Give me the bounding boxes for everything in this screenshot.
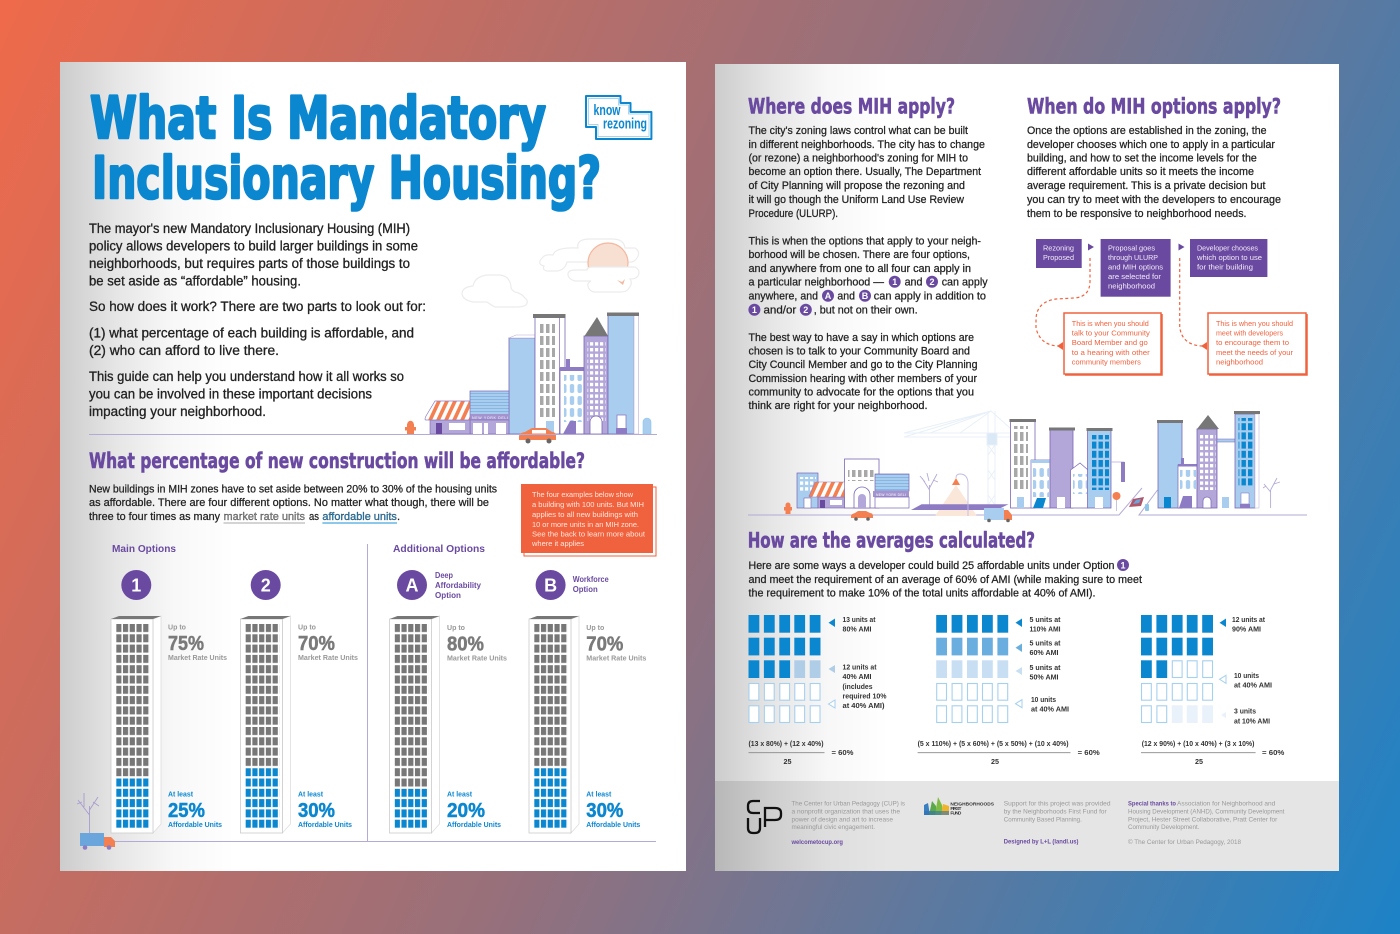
figures: option 2: 70% <box>298 633 335 655</box>
text: thanks: Association for Neighborhood and <box>1177 801 1276 808</box>
icons: inline option badges: B <box>862 291 869 301</box>
chart: unit mix three: 90% AMI <box>1232 625 1261 634</box>
figures: option B: Affordable Units <box>586 820 640 829</box>
chart: unit mix three: 3 units <box>1234 707 1256 716</box>
chart: unit mix three: 12 units at <box>1232 615 1265 624</box>
figures: option B: 70% <box>586 634 623 656</box>
intro text: (1) what percentage of each building is affordable, and <box>89 326 414 340</box>
text: where does MIH apply: and <box>837 290 855 302</box>
panel: left page <box>60 62 686 871</box>
text: where does MIH apply: Procedure (ULURP). <box>748 208 838 220</box>
logo: neighborhoods first fund: FUND <box>950 810 962 816</box>
option 1 <box>111 570 227 833</box>
text: CUP description: meaningful civic engagement. <box>792 824 875 831</box>
step: proposal through ULURP: are selected for <box>1108 272 1162 281</box>
arrow: to step three <box>1178 244 1184 250</box>
text: where does MIH apply: The best way to have a say in which options are <box>748 332 974 344</box>
arrow: to step two <box>1088 244 1094 250</box>
callout: meet developers: This is when you should <box>1216 319 1293 328</box>
intro text: be set aside as “affordable” housing. <box>89 274 301 288</box>
chart: unit mix one: required 10% <box>842 692 887 701</box>
chart: unit mix one: 25 <box>784 757 792 766</box>
paragraph: set aside: as affordable. There are four different options. No matter what though, there will be <box>89 497 489 509</box>
text: where does MIH apply: it will go though the Uniform Land Use Review <box>748 194 964 206</box>
figures: option A: At least <box>447 790 473 798</box>
illustration: city skyline <box>405 239 651 444</box>
icon: right buildings <box>1157 411 1260 508</box>
divider line <box>89 434 657 436</box>
chart: unit mix two: 5 units at <box>1030 663 1061 672</box>
logo: neighborhoods first fund: NEIGHBORHOODS <box>950 801 995 807</box>
title: Inclusionary Housing? <box>92 144 601 212</box>
chart: unit mix three: at 40% AMI <box>1234 681 1272 690</box>
heading: averages: How are the averages calculated? <box>748 528 1035 552</box>
icon: pale blue bus stop <box>1145 504 1149 511</box>
text: when do MIH options apply: developer chooses which one to apply in a particular <box>1027 139 1275 151</box>
logo: know rezoning <box>586 96 651 139</box>
text: where does MIH apply: Commission hearing with other members of your <box>748 373 977 385</box>
icons: inline option badges: 1 <box>892 277 897 287</box>
text: where does MIH apply: of City Planning will propose the rezoning and <box>748 180 965 192</box>
text: where does MIH apply: anywhere, and <box>748 290 818 302</box>
figures: option 2: Market Rate Units <box>298 653 358 662</box>
icons: inline option badges: A <box>825 291 832 301</box>
text: where does MIH apply: can apply in addition to <box>874 290 986 302</box>
option B: workforce: Workforce <box>573 575 609 584</box>
heading: where does MIH apply: Where does MIH apply? <box>748 94 955 118</box>
building: option 1 tower <box>111 616 161 833</box>
chart: unit mix two: 5 units at <box>1030 638 1061 648</box>
panel: right page <box>715 64 1339 871</box>
step: proposal through ULURP: Proposal goes <box>1108 244 1155 252</box>
callout: community board: talk to your Community <box>1072 328 1150 338</box>
option A: deep affordability: Option <box>435 591 461 600</box>
intro text: impacting your neighborhood. <box>89 404 266 419</box>
chart: unit mix two: 25 <box>991 757 999 766</box>
figures: option B: 30% <box>586 800 623 822</box>
step: rezoning proposed: Rezoning <box>1043 244 1074 252</box>
text: when do MIH options apply <box>1027 125 1281 220</box>
chart: unit mix one: 80% AMI <box>842 625 872 634</box>
chart: unit mix two: (5 x 110%) + (5 x 60%) + (5 x 50%) + (10 x 40%) <box>918 739 1069 748</box>
text: when do MIH options apply: average requirement. This is a private decision but <box>1027 180 1266 192</box>
figures: option 1: 75% <box>168 633 204 655</box>
chart: unit mix three: at 10% AMI <box>1234 716 1270 725</box>
step: proposal through ULURP: neighborhood <box>1108 282 1155 290</box>
figures: option 2: 30% <box>298 800 335 822</box>
paragraph: set aside: affordable units <box>322 511 397 523</box>
text: thanks: Project, Hester Street Collaborative, Pratt Center for <box>1128 816 1278 823</box>
figures: option B: At least <box>586 790 612 798</box>
text: where does MIH apply: a particular neighborhood — <box>748 276 884 288</box>
chart: unit mix one: (13 x 80%) + (12 x 40%) <box>748 739 824 748</box>
icon: shops block <box>797 459 909 508</box>
figures: option 1: At least <box>168 790 194 798</box>
paragraph: set aside: . <box>397 511 400 523</box>
icon: shops block: NEW YORK DELI <box>876 493 906 497</box>
icon: street baseline <box>748 488 1307 515</box>
option A: deep affordability: A <box>406 576 418 596</box>
logo: CUP <box>748 801 781 833</box>
icon: tree <box>920 473 938 505</box>
figures: option B <box>586 623 646 829</box>
chart: unit mix two: 110% AMI <box>1030 625 1060 634</box>
figures: option 1: Affordable Units <box>168 820 222 829</box>
figures: option 2 <box>298 622 358 829</box>
step: developer chooses <box>1190 239 1267 277</box>
step: rezoning proposed <box>1036 239 1082 268</box>
arrow: dashed to developers <box>1180 258 1207 350</box>
paragraph: set aside <box>89 484 497 523</box>
intro text <box>89 221 426 419</box>
figures: option A: Affordable Units <box>447 820 501 829</box>
figures: option B: Up to <box>586 623 605 632</box>
chart: unit mix three: 25 <box>1195 757 1203 766</box>
step: developer chooses: for their building <box>1197 262 1253 272</box>
icon: right tree <box>1263 478 1280 508</box>
intro text: policy allows developers to build larger buildings in some <box>89 238 418 254</box>
flow chart: process <box>1036 239 1307 375</box>
chart: unit mix two: at 40% AMI <box>1031 705 1069 714</box>
chart: unit mix three: (12 x 90%) + (10 x 40%) + (3 x 10%) <box>1142 739 1255 748</box>
figures: option A <box>447 623 507 829</box>
step: proposal through ULURP: and MIH options <box>1108 262 1163 272</box>
figures: option 2: Affordable Units <box>298 820 352 829</box>
text: when do MIH options apply: building, and how to set the income levels for the <box>1027 152 1257 164</box>
text: where does MIH apply: and anywhere from one to all four can apply in <box>748 263 971 275</box>
icons: inline option badges: 1 <box>752 305 757 315</box>
text: funder credit <box>1004 801 1111 846</box>
arrow: dashed to community board <box>1036 258 1090 350</box>
building: option A tower <box>390 616 440 833</box>
option 1: 1 <box>131 576 141 596</box>
figures: option B: Market Rate Units <box>586 654 646 662</box>
icon: mid buildings <box>1010 419 1125 511</box>
text: where does MIH apply: borhood will be chosen. There are four options, <box>748 249 970 261</box>
icon: buildings <box>425 312 651 434</box>
paragraph: set aside: as <box>309 511 319 523</box>
label: additional options: Additional Options <box>393 544 485 555</box>
intro text: The mayor's new Mandatory Inclusionary Housing (MIH) <box>89 221 410 236</box>
chart: unit mix one: 40% AMI <box>842 672 872 681</box>
text: where does MIH apply: , but not on their own. <box>814 304 918 316</box>
intro text: This guide can help you understand how it all works so <box>89 369 404 384</box>
footer <box>748 797 1285 846</box>
option A: deep affordability <box>390 570 507 833</box>
callout: community board: This is when you should <box>1072 319 1149 328</box>
option B: workforce <box>529 570 646 833</box>
title: What Is Mandatory <box>90 84 546 152</box>
icon: delivery truck <box>984 508 1012 522</box>
icon: bare tree <box>77 793 99 833</box>
text: funder credit: Designed by L+L (landl.us) <box>1004 839 1078 846</box>
paragraph: set aside: market rate units <box>224 511 305 523</box>
text: when do MIH options apply: them to be responsive to neighborhood needs. <box>1027 208 1246 220</box>
icon: crane <box>904 411 1010 515</box>
text: thanks: Special thanks to <box>1128 801 1176 808</box>
chart: unit mix two: 5 units at <box>1030 615 1061 624</box>
text: funder credit: Support for this project was provided <box>1004 801 1111 808</box>
label: main options: Main Options <box>112 544 176 555</box>
callout: meet developers <box>1208 313 1307 375</box>
intro text: (2) who can afford to live there. <box>89 343 279 358</box>
figures: option 1: Market Rate Units <box>168 653 227 662</box>
text: CUP description: The Center for Urban Pedagogy (CUP) is <box>792 801 906 808</box>
logo: neighborhoods first fund: FIRST <box>950 806 961 812</box>
step: proposal through ULURP: through ULURP <box>1108 253 1158 262</box>
figures: option A: Market Rate Units <box>447 654 507 662</box>
icons: inline option badges: 2 <box>803 305 808 315</box>
text: averages intro <box>748 559 1142 600</box>
text: funder credit: by the Neighborhoods First Fund for <box>1004 809 1107 816</box>
icon: buildings: NEW YORK DELI <box>472 416 508 420</box>
text: CUP description <box>791 801 906 846</box>
option 2 <box>240 570 358 833</box>
intro text: neighborhoods, but requires parts of those buildings to <box>89 256 410 271</box>
icon: clouds and sun <box>462 239 639 307</box>
callout: community board <box>1064 313 1162 375</box>
text: thanks: Community Development. <box>1128 824 1200 831</box>
paragraph: set aside: three to four times as many <box>89 511 220 523</box>
callout: meet developers: neighborhood <box>1216 358 1263 366</box>
text: when do MIH options apply: Once the options are established in the zoning, the <box>1027 125 1267 137</box>
text: where does MIH apply: and/or <box>764 304 797 316</box>
icon: orange car <box>519 428 556 444</box>
figures: option 1 <box>168 622 227 829</box>
chart: unit mix three <box>1141 615 1285 766</box>
option B: workforce: B <box>544 576 557 596</box>
text: when do MIH options apply: different affordable units so it meets the income <box>1027 166 1254 178</box>
chart: unit mix one: 12 units at <box>842 662 877 672</box>
figures: option A: 80% <box>447 634 484 656</box>
callout: community board: Board Member and go <box>1072 338 1148 347</box>
heading: when do MIH options apply: When do MIH options apply? <box>1027 94 1281 118</box>
step: developer chooses: which option to use <box>1196 253 1262 262</box>
footer band <box>715 781 1339 871</box>
icons: inline option badges <box>748 276 938 316</box>
figures: option A: Up to <box>447 623 466 632</box>
chart: unit mix two: = 60% <box>1078 748 1100 757</box>
callout: 100 units note: where it applies <box>531 539 584 548</box>
logo: know rezoning: know <box>594 102 621 119</box>
callout: meet developers: meet the needs of your <box>1216 348 1294 357</box>
title <box>90 84 601 212</box>
step: rezoning proposed: Proposed <box>1043 253 1074 262</box>
callout: meet developers: to encourage them to <box>1216 338 1289 347</box>
text: CUP description: power of design and art to increase <box>792 816 893 823</box>
callout: 100 units note <box>521 484 656 556</box>
figures: option A: 20% <box>447 800 485 822</box>
chart: unit mix one: (includes <box>842 682 872 691</box>
text: averages intro: the requirement to make 10% of the total units affordable at 40% of AMI). <box>748 588 1096 600</box>
option B: workforce: Option <box>573 585 598 594</box>
building: option B tower <box>529 616 579 833</box>
chart: unit mix one: = 60% <box>832 748 854 757</box>
text: where does MIH apply: City Council Member and go to the City Planning <box>748 359 978 371</box>
text: where does MIH apply: think are right for your neighborhood. <box>748 400 928 412</box>
callout: 100 units note: a building with 100 units. But MIH <box>532 500 644 509</box>
icons: inline option badges: 2 <box>929 277 935 287</box>
callout: 100 units note: The four examples below show <box>532 490 634 499</box>
heading: affordable percentage: What percentage of new construction will be affordable? <box>89 449 585 473</box>
paragraph: set aside: New buildings in MIH zones have to set aside between 20% to 30% of the housing units <box>89 484 497 496</box>
icon: delivery truck <box>80 833 115 850</box>
chart: unit mix two: 50% AMI <box>1030 672 1058 682</box>
chart: unit mix one: 13 units at <box>842 615 876 624</box>
icon: orange car <box>851 511 873 521</box>
chart: unit mix one: at 40% AMI) <box>842 701 885 710</box>
callout: meet developers: meet with developers <box>1216 328 1283 338</box>
text: thanks: Housing Development (ANHD), Community Development <box>1128 809 1285 816</box>
callout: 100 units note: 10 or more units in an MIH zone. <box>532 520 639 529</box>
text: CUP description: a nonprofit organization that uses the <box>792 809 900 816</box>
chart: unit mix three: = 60% <box>1262 748 1285 757</box>
figures: option 1: Up to <box>168 622 187 632</box>
text: thanks <box>1128 801 1285 846</box>
chart: unit mix three: 10 units <box>1234 671 1259 680</box>
logo: know rezoning: rezoning <box>603 116 647 132</box>
text: where does MIH apply: The city's zoning laws control what can be built <box>748 125 968 137</box>
icon: hydrant <box>784 502 792 514</box>
text: averages intro: Here are some ways a developer could build 25 affordable units under Option <box>748 560 1114 572</box>
callout: 100 units note: See the back to learn more about <box>532 530 645 538</box>
illustration: neighborhood street <box>748 411 1307 522</box>
icon: plaza and street lamp <box>911 474 1008 516</box>
icon: dark red car <box>1129 497 1144 507</box>
step: developer chooses: Developer chooses <box>1197 244 1258 252</box>
text: where does MIH apply: in different neighborhoods. The city has to change <box>748 139 985 151</box>
chart: unit mix two: 60% AMI <box>1030 648 1058 657</box>
text: averages intro: and meet the requirement of an average of 60% of AMI (while making sure to meet <box>748 574 1142 586</box>
chart: unit mix one <box>748 615 887 766</box>
chart: unit mix two <box>918 615 1100 766</box>
text: where does MIH apply: and <box>905 276 922 288</box>
callout: community board: community members <box>1072 358 1141 366</box>
logo: neighborhoods first fund <box>924 797 995 816</box>
intro text: So how does it work? There are two parts to look out for: <box>89 299 426 314</box>
text: where does MIH apply: (or rezone) a neighborhood's zoning for MIH to <box>748 152 968 164</box>
option 2: 2 <box>261 576 271 596</box>
text: where does MIH apply: community to advocate for the options that you <box>748 386 974 398</box>
chart: unit mix two: 10 units <box>1031 695 1056 704</box>
icon: fire hydrant <box>405 421 416 434</box>
text: CUP description: welcometocup.org <box>791 839 843 846</box>
text: funder credit: Community Based Planning. <box>1004 816 1082 823</box>
text: where does MIH apply: This is when the options that apply to your neigh- <box>748 236 981 248</box>
text: thanks: © The Center for Urban Pedagogy, 2018 <box>1128 838 1241 846</box>
callout: community board: to a hearing with other <box>1072 348 1150 357</box>
text: where does MIH apply <box>748 125 988 412</box>
text: where does MIH apply: chosen is to talk to your Community Board and <box>748 346 970 358</box>
step: proposal through ULURP <box>1101 239 1171 297</box>
option A: deep affordability: Deep <box>435 571 453 580</box>
text: where does MIH apply: can apply <box>942 276 988 288</box>
figures: option 2: At least <box>298 790 324 798</box>
figures: option 1: 25% <box>168 800 205 822</box>
option A: deep affordability: Affordability <box>435 581 482 590</box>
text: when do MIH options apply: you can try to meet with the developers to encourage <box>1027 194 1281 206</box>
building: option 2 tower <box>240 616 290 833</box>
callout: 100 units note: applies to all new buildings with <box>532 510 638 519</box>
intro text: you can be involved in these important decisions <box>89 386 372 402</box>
figures: option 2: Up to <box>298 622 317 632</box>
text: averages intro: 1 <box>1120 560 1126 570</box>
text: where does MIH apply: become an option there. Usually, The Department <box>748 166 981 178</box>
